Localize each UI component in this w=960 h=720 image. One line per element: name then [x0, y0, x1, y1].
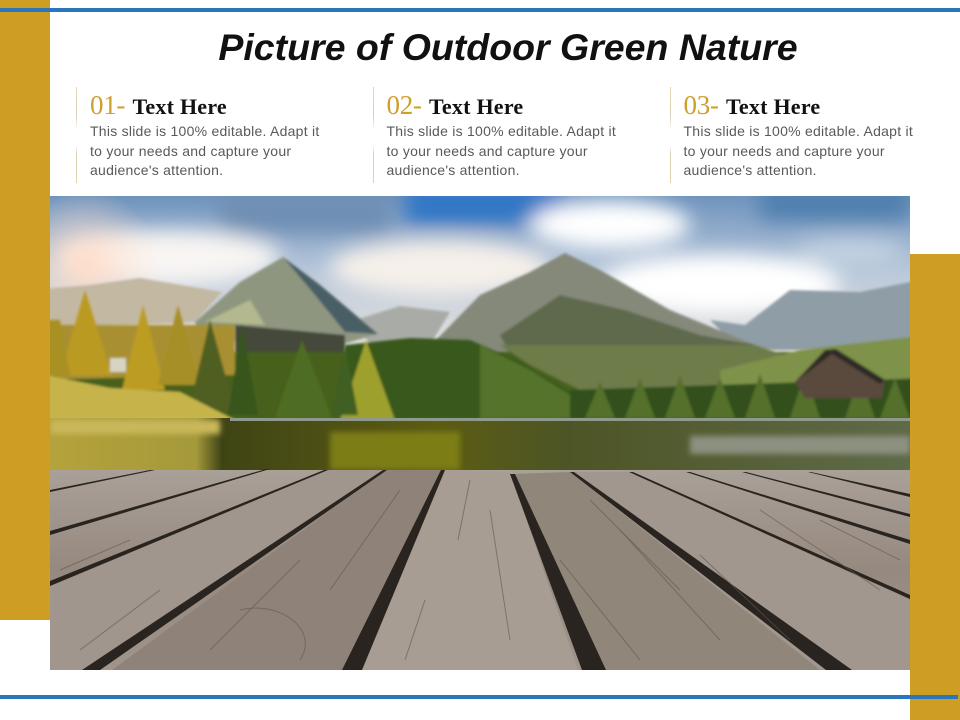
top blue rule	[0, 8, 960, 12]
text block 03: audience's attention.	[684, 162, 817, 178]
landscape photo: lake and wooden deck	[50, 196, 910, 670]
text block 02	[373, 87, 616, 183]
lake	[50, 418, 910, 474]
trees	[585, 372, 910, 418]
title: Picture of Outdoor Green Nature	[218, 26, 798, 68]
forest	[30, 290, 930, 445]
text block 02: audience's attention.	[386, 162, 520, 178]
text block 03: to your needs and capture your	[684, 142, 885, 158]
plank gaps	[50, 469, 910, 670]
mountains	[30, 253, 930, 375]
text block 01: 01- Text Here	[90, 90, 227, 120]
text block 01: to your needs and capture your	[90, 142, 291, 158]
text block 01	[76, 87, 320, 183]
wood grain	[60, 480, 900, 660]
bottom blue rule	[0, 695, 958, 699]
wooden deck	[50, 469, 910, 670]
text block 01: audience's attention.	[90, 162, 223, 178]
text block 02: to your needs and capture your	[386, 142, 588, 158]
gold block left	[0, 0, 50, 620]
text block 02: This slide is 100% editable. Adapt it	[386, 123, 616, 139]
text block 02: 02- Text Here	[386, 90, 523, 120]
gold block right	[910, 254, 960, 720]
sky	[10, 186, 910, 366]
base slopes	[30, 352, 930, 422]
text block 03: This slide is 100% editable. Adapt it	[684, 123, 913, 139]
text block 03: 03- Text Here	[684, 90, 820, 120]
text block 01: This slide is 100% editable. Adapt it	[90, 123, 320, 139]
text block 03	[670, 87, 913, 183]
